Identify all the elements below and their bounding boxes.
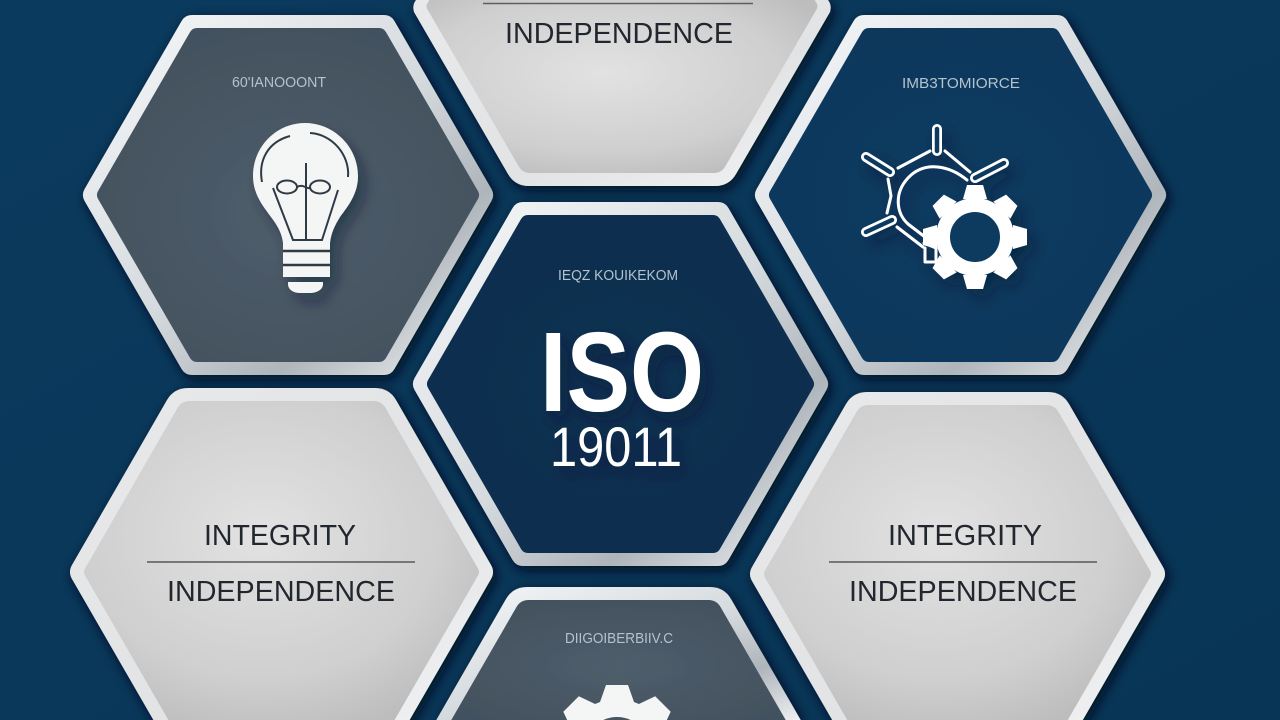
icon: gear <box>563 685 671 720</box>
title: ISO: ISO <box>540 309 704 435</box>
panel: bottom gear hexagon <box>436 587 801 720</box>
small label: IEQZ KOUIKEKOM <box>558 268 678 284</box>
small label: DIIGOIBERBIIV.C <box>565 631 673 647</box>
icon: molecule and gear <box>866 129 1027 289</box>
label: independence: INDEPENDENCE <box>505 18 733 50</box>
small label: IMB3TOMIORCE <box>902 76 1020 92</box>
panel: lightbulb hexagon <box>95 27 481 363</box>
small label: 60'IANOOONT <box>232 75 326 91</box>
label: integrity: INTEGRITY <box>888 520 1042 552</box>
panel: centre ISO hexagon <box>425 214 816 554</box>
subtitle: 19011: 19011 <box>550 415 682 478</box>
label: independence: INDEPENDENCE <box>167 576 395 608</box>
label: independence: INDEPENDENCE <box>849 576 1077 608</box>
panel: integrity right hexagon <box>750 392 1165 720</box>
panel: gear network hexagon <box>767 27 1154 363</box>
panel: integrity left hexagon <box>70 388 493 720</box>
icon: lightbulb <box>253 123 358 293</box>
panel: top independence hexagon <box>413 0 831 186</box>
gear <box>923 185 1027 289</box>
label: integrity: INTEGRITY <box>204 520 356 552</box>
